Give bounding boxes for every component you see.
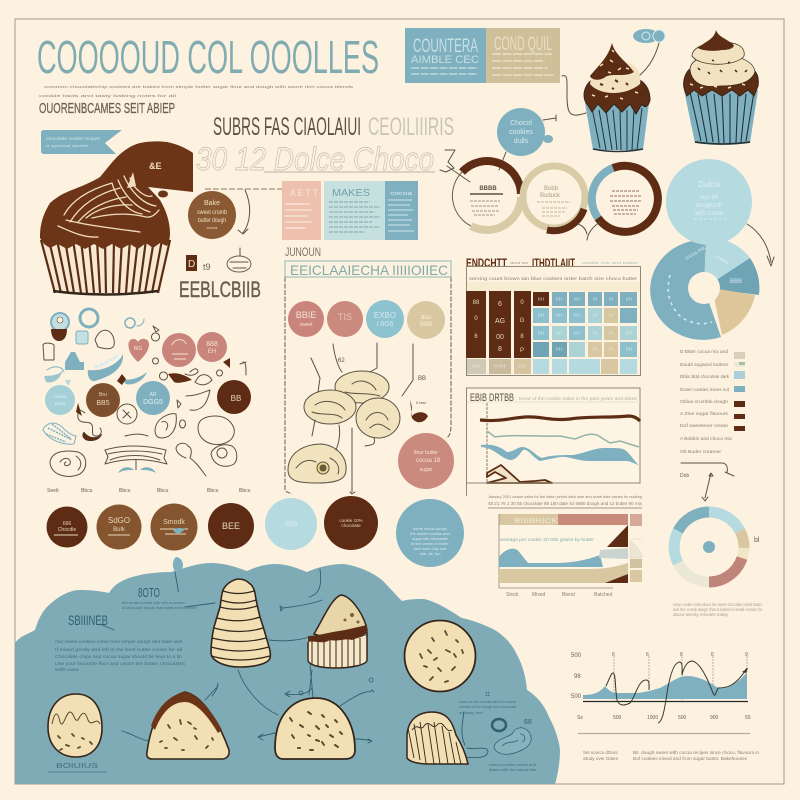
circle 6: chocolate bbox=[341, 523, 361, 528]
dome cookie bbox=[275, 698, 355, 759]
chart: bottom area chart: Ss bbox=[577, 715, 583, 721]
pink circle two: TIS bbox=[338, 312, 352, 322]
tan circle: BBB bbox=[420, 322, 432, 328]
panel: data grid: AG bbox=[495, 318, 505, 325]
blue circle: r.6G6 bbox=[376, 321, 394, 328]
chart: line chart panel bbox=[466, 388, 643, 508]
panel: data grid: G bbox=[520, 318, 525, 324]
circle 2: Bulk bbox=[113, 527, 126, 533]
heading: 8OTO bbox=[138, 585, 160, 600]
row of circles bbox=[46, 496, 464, 567]
small note right: 11 bbox=[485, 692, 490, 698]
tan circle bbox=[407, 301, 445, 339]
chart: stacked area panel bbox=[499, 514, 642, 598]
dark circle bbox=[217, 380, 251, 414]
pink circle two bbox=[327, 301, 363, 337]
chart: donut: bl bbox=[754, 537, 760, 544]
panel: cookie anatomy: BB bbox=[418, 376, 426, 382]
arrow and brown badge: sweet crumb bbox=[197, 210, 228, 216]
small note right: so tasty and bbox=[459, 711, 483, 715]
small note right: crumbs of the dough and chocolate bbox=[459, 705, 516, 709]
teal doodles bbox=[43, 309, 251, 444]
paragraph: with care bbox=[55, 667, 80, 672]
panel: data grid: 8 bbox=[520, 334, 524, 340]
chart: line chart panel: trend of the cookie sales in the past years and dates bbox=[519, 396, 638, 401]
dark circle: BB bbox=[231, 394, 241, 403]
circle 1: Chocdle bbox=[58, 527, 76, 533]
paragraph: Our sweet cookies come from simple dough and bake well bbox=[55, 639, 182, 644]
blue circle bbox=[366, 300, 404, 338]
chart: bottom area chart bbox=[571, 652, 760, 761]
outline doodles: Bbcu bbox=[157, 488, 169, 494]
chart: pie with big circle: suo 84 bbox=[700, 195, 719, 201]
ribbon label: chocolate cookie recipes bbox=[46, 136, 101, 141]
subtitle block: common chocolatechip cookies are baked from simple butter sugar flour and dough with some rich cocoa blends bbox=[44, 84, 353, 89]
pink circle one: BBIE bbox=[296, 310, 316, 320]
subtitle block bbox=[39, 84, 353, 117]
legend: Dob bbox=[680, 473, 689, 479]
decorative headline: 30 12 Dolce Choco bbox=[196, 141, 434, 177]
chart: bottom area chart: 500 bbox=[613, 715, 622, 721]
brown circle: Bru bbox=[99, 392, 107, 398]
circle 1: 666 bbox=[63, 521, 71, 527]
circle 6 bbox=[324, 496, 378, 550]
circle 3 bbox=[150, 504, 198, 550]
arrow and brown badge: cocoa bbox=[207, 225, 218, 230]
panel: data grid: cookie mix and batter bbox=[582, 260, 639, 265]
large blue text circle: some cocoa dough bbox=[413, 526, 447, 531]
chart: stacked area panel: BIIIBRICK bbox=[514, 518, 558, 525]
icon: blue cupcake two bbox=[684, 30, 758, 144]
legend: Doser cookies mixes nut bbox=[680, 387, 730, 392]
blue circle: EXBO bbox=[374, 311, 396, 320]
text note: about twenty minutes today bbox=[673, 612, 729, 617]
chart: bottom area chart: 500 bbox=[571, 694, 582, 700]
heart: BIG bbox=[134, 346, 142, 352]
panel: top blue and tan boxes: AIMBLE CEC bbox=[411, 54, 479, 66]
pink circle one: sweet bbox=[299, 322, 313, 328]
triangular cookie bbox=[147, 692, 229, 759]
large blue text circle: and most chip sea bbox=[414, 546, 447, 551]
circle 3: Smodk bbox=[163, 519, 185, 526]
subtitle block: cookie facts and tasty baking notes for all bbox=[39, 93, 176, 98]
cookie stack bbox=[211, 579, 270, 667]
caption: BOIUIUS bbox=[56, 763, 98, 770]
blue circle bbox=[136, 381, 170, 415]
chart: stacked area panel: Mixed bbox=[532, 592, 546, 598]
chart: bottom area chart: 8 bbox=[680, 652, 683, 658]
large blue text circle: the sweet cookies and bbox=[410, 531, 450, 536]
ring one: BBBB bbox=[479, 186, 497, 192]
legend: Doubl sugared butters bbox=[680, 362, 729, 367]
legend bbox=[680, 349, 745, 501]
panel: data grid: and so bbox=[510, 260, 529, 265]
chart: three progress rings bbox=[452, 161, 658, 240]
cookie pieces bbox=[288, 371, 400, 483]
panel: data grid: 8 bbox=[498, 346, 502, 353]
circle 5 bbox=[265, 498, 317, 550]
panel: info table: MAKES bbox=[332, 188, 370, 199]
text note: and the crumb dough that is baked in small rounds for bbox=[673, 607, 762, 612]
icon: blue cupcake one bbox=[584, 43, 650, 152]
panel: info table: cocoa bbox=[390, 191, 412, 197]
circle 6: cookie 10% bbox=[339, 518, 363, 523]
panel: data grid: ENDCHTT bbox=[466, 256, 507, 270]
circle 2 bbox=[96, 504, 142, 550]
pink large circle: cocoa 18 bbox=[416, 458, 441, 464]
panel: data grid: serving count brown tan blue cookies order batch size choco butter bbox=[469, 276, 638, 281]
ring two: Bobb bbox=[544, 186, 559, 192]
round cookie bbox=[404, 620, 476, 692]
connectors bbox=[122, 569, 488, 758]
small note right: sweet cookies mixed and bbox=[489, 763, 536, 767]
callout: blue bubble: cookies bbox=[509, 129, 533, 136]
circle 5: 8BB bbox=[284, 521, 298, 528]
outline doodles: Bbcu bbox=[239, 488, 251, 494]
chart: bottom area chart: 900 bbox=[710, 715, 719, 721]
pink circles: EH bbox=[208, 349, 216, 355]
blue circle: AR bbox=[150, 392, 157, 398]
pink large circle: sugar bbox=[420, 467, 433, 473]
label: small doodle and heading: EEBLCBIIB bbox=[179, 277, 261, 302]
ribbon label bbox=[41, 130, 122, 154]
panel: data grid: P bbox=[520, 348, 524, 354]
panel: info table: A E T T bbox=[290, 188, 318, 198]
small note right: 68 bbox=[524, 719, 532, 726]
icon: balloon connector bbox=[633, 29, 665, 75]
small note right: dates with the cocoa bits bbox=[489, 768, 536, 772]
wedge cookie bbox=[407, 712, 468, 764]
chart: stacked area panel: Batched bbox=[594, 592, 613, 598]
text note bbox=[673, 602, 762, 617]
circle 4: BEE bbox=[222, 521, 240, 531]
panel: data grid: ITHDTLAIIT bbox=[532, 256, 575, 270]
chart: bottom area chart: 6 bbox=[646, 652, 649, 658]
chart: pie with big circle: doughsoft bbox=[696, 203, 723, 209]
arrow and brown badge: butter dough bbox=[198, 218, 226, 224]
outline doodles: Bbcu bbox=[119, 488, 131, 494]
blue circle: DGG5 bbox=[143, 399, 163, 406]
subheading: SBIIINEB bbox=[68, 612, 108, 628]
chart: bottom area chart: 500 bbox=[678, 715, 687, 721]
teal circle bbox=[45, 385, 75, 415]
chart: pie with big circle: crumbs bbox=[714, 254, 730, 266]
panel: data grid: 0 bbox=[474, 316, 478, 322]
chart: pie with big circle: with cocoa bbox=[694, 211, 724, 217]
chart: bottom area chart: 9 bbox=[745, 652, 748, 658]
outline doodles: Seeb bbox=[47, 488, 59, 494]
panel: cookie anatomy: EEICLAAIECHA IIIIIOIIEC bbox=[290, 262, 448, 278]
large blue text circle bbox=[396, 499, 464, 567]
caption bbox=[48, 763, 107, 772]
small note right: notes on the cookies and the sweet bbox=[459, 700, 516, 704]
arrow and brown badge bbox=[188, 189, 282, 239]
panel: cookie anatomy bbox=[285, 261, 454, 494]
doodle cluster bbox=[43, 309, 251, 494]
callout: blue bubble: dulls bbox=[514, 138, 529, 145]
pink circles bbox=[162, 332, 227, 367]
panel: info table bbox=[282, 181, 418, 259]
panel: data grid: 6 bbox=[474, 334, 478, 340]
paragraph: Chocolate chips and cocoa sugar should be kept to a tin bbox=[55, 654, 183, 659]
chart: bottom area chart: 500 bbox=[571, 653, 582, 659]
panel: blue cloud: the small cookie pile with a cream bbox=[122, 601, 185, 605]
chart: bottom area chart: 98 bbox=[574, 674, 581, 680]
panel: data grid bbox=[466, 256, 640, 376]
panel: top blue and tan boxes: COND QUIL bbox=[494, 34, 552, 55]
decorative headline bbox=[196, 113, 470, 182]
legend: Ob Buder creamer bbox=[680, 449, 722, 454]
chart: bottom area chart: 50 bbox=[745, 715, 751, 721]
decorative headline: SUBRS FAS CIAOLAIUI bbox=[213, 113, 361, 141]
chart: line chart panel: January 2001 cookie sales for the batch period data note and some date values for reading bbox=[488, 495, 642, 499]
ribbon label: a special sweet bbox=[46, 143, 89, 148]
chart: donut bbox=[674, 512, 760, 582]
pink large circle: flour butter bbox=[414, 450, 438, 456]
title: COOOOUD COL OOOLLES bbox=[37, 31, 379, 83]
chart: pie with big circle bbox=[650, 159, 774, 340]
teal circle: cookie bbox=[53, 394, 67, 399]
large blue text circle: doh. ok, fun bbox=[420, 551, 440, 556]
chart: line chart panel: EBIB DRTBB bbox=[470, 392, 514, 404]
decorative headline: CEOILIIIRIS bbox=[368, 113, 454, 141]
outline doodles bbox=[43, 326, 251, 494]
chart: bottom area chart: 6 bbox=[612, 652, 615, 658]
large blue text circle: in the cream of butter bbox=[411, 541, 450, 546]
panel: info table: JUNOUN bbox=[285, 245, 321, 259]
circle 4 bbox=[208, 503, 254, 549]
ring three bbox=[592, 166, 658, 232]
legend: A Bobbin and choco mix bbox=[680, 436, 733, 441]
icon: large chocolate cupcake: &E bbox=[149, 161, 162, 171]
paragraph: Use your favourite flour and cream the butter, chocolates bbox=[55, 661, 186, 666]
legend: Dof sweetener cream bbox=[680, 423, 728, 428]
text note: some cookie notes about the sweet chocolate mixed batter bbox=[673, 602, 762, 607]
cupcake slice bbox=[307, 595, 367, 668]
grid cells bbox=[467, 292, 637, 374]
chart: pie with big circle: Dulcis bbox=[698, 180, 720, 189]
ring one bbox=[452, 161, 521, 230]
ring two: Buduck bbox=[540, 193, 561, 199]
panel: data grid: 6 bbox=[498, 301, 502, 308]
panel: top blue and tan boxes: COUNTERA bbox=[413, 36, 478, 57]
label: small doodle and heading bbox=[179, 248, 261, 302]
brown circle: BB5 bbox=[96, 400, 110, 407]
chart: stacked area panel: Stock bbox=[506, 592, 519, 598]
chart: bottom area chart: 6 bbox=[711, 652, 714, 658]
small note right bbox=[459, 692, 536, 772]
tan circle: dou bbox=[421, 315, 431, 321]
teal circle: Bond bbox=[55, 401, 66, 406]
legend: A Zine sugar flavours bbox=[680, 411, 729, 416]
panel: cookie anatomy: 0 test bbox=[416, 400, 427, 405]
chart: line chart panel: 48 21 76 1 30 55 chocolate 88 160 date 43 6950 dough and 12 butter 90 mix bbox=[488, 501, 643, 506]
panel: data grid: 0 bbox=[520, 300, 524, 306]
pink large circle bbox=[398, 433, 454, 489]
legend: D Bitter cocoa mix and bbox=[680, 349, 729, 354]
legend: Oblue crumble dough bbox=[680, 399, 729, 404]
subtitle block: OUORENBCAMES SEIT ABIEP bbox=[39, 100, 175, 117]
chart: bottom area chart: Bit. dough sweet with cocoa recipes since choco, flavours in bbox=[633, 750, 760, 755]
outline doodles: Bbcu bbox=[207, 488, 219, 494]
paragraph bbox=[55, 639, 186, 672]
panel: top blue and tan boxes bbox=[405, 28, 586, 115]
pink circle one bbox=[288, 301, 324, 337]
arrow and brown badge: Bake bbox=[204, 200, 220, 207]
chart: pie with big circle: cocoa mix bbox=[684, 245, 707, 262]
panel: blue cloud: of chocolate dough that bakes evenly under bbox=[122, 606, 198, 610]
heart bbox=[128, 339, 149, 362]
chart: bottom area chart: Study over Dates bbox=[583, 756, 619, 761]
panel: cookie anatomy: 62 bbox=[338, 358, 345, 364]
paragraph: If mixed gently and left in the best butter cream for all bbox=[55, 647, 182, 652]
ring two bbox=[523, 166, 585, 231]
pink circles: 888 bbox=[206, 341, 218, 348]
panel: data grid: 00 bbox=[496, 334, 504, 341]
label: small doodle and heading: t9 bbox=[203, 262, 211, 272]
panel: blue cloud bbox=[15, 528, 560, 784]
callout: blue bubble: Chocol bbox=[510, 120, 532, 127]
chart: pie with big circle: BBB bbox=[730, 279, 742, 285]
chart: bottom area chart: Bof cookies mixed and from sugar butter. Bakehouses bbox=[633, 756, 748, 761]
chart: bottom area chart: Set source dDosc bbox=[583, 750, 619, 755]
large blue text circle: sugar bits chocolate bbox=[412, 536, 449, 541]
label: small doodle and heading: D bbox=[188, 259, 195, 270]
panel: data grid: 88 bbox=[473, 300, 480, 306]
chart: stacked area panel: average per cookie 20 000 grams by butter bbox=[500, 537, 595, 542]
brown circle bbox=[86, 383, 120, 417]
callout: blue bubble bbox=[497, 108, 556, 170]
small domed cookie bbox=[48, 694, 102, 757]
circle 1 bbox=[46, 506, 88, 548]
chart: stacked area panel: Blend bbox=[562, 592, 575, 598]
legend: Dbbs Bdd chocolate dark bbox=[680, 374, 730, 379]
outline doodles: Bbcu bbox=[81, 488, 93, 494]
circle 2: SdGO bbox=[108, 516, 130, 525]
icon: large chocolate cupcake bbox=[40, 141, 193, 294]
chart: bottom area chart: 1000 bbox=[647, 715, 658, 721]
